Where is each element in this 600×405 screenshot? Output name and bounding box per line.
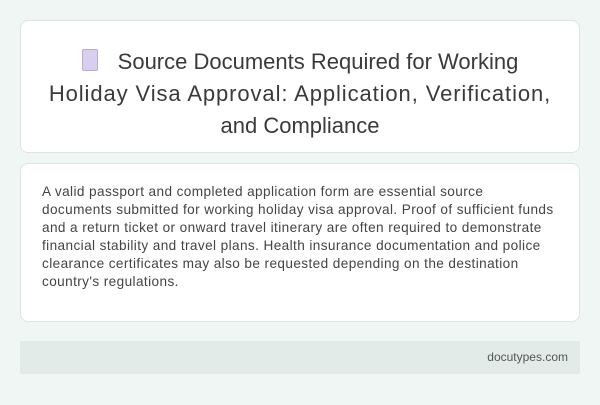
footer [20,341,580,374]
icon: document [82,49,98,71]
text block: country's regulations. [42,274,179,289]
text block: documents submitted for working holiday visa approval. Proof of sufficient funds [42,202,554,217]
footer text: docutypes.com [487,350,568,364]
title [49,49,551,138]
panel: description [20,163,580,322]
title: Source Documents Required for Working [118,49,518,74]
text block: financial stability and travel plans. Health insurance documentation and police [42,238,541,253]
text block: clearance certificates may also be requested depending on the destination [42,256,519,271]
title: Holiday Visa Approval: Application, Verification, [49,81,551,106]
title: and Compliance [220,113,379,138]
text block [42,184,554,289]
text block: A valid passport and completed application form are essential source [42,184,483,199]
text block: and a return ticket or onward travel itinerary are often required to demonstrate [42,220,542,235]
panel: title card [20,20,580,153]
